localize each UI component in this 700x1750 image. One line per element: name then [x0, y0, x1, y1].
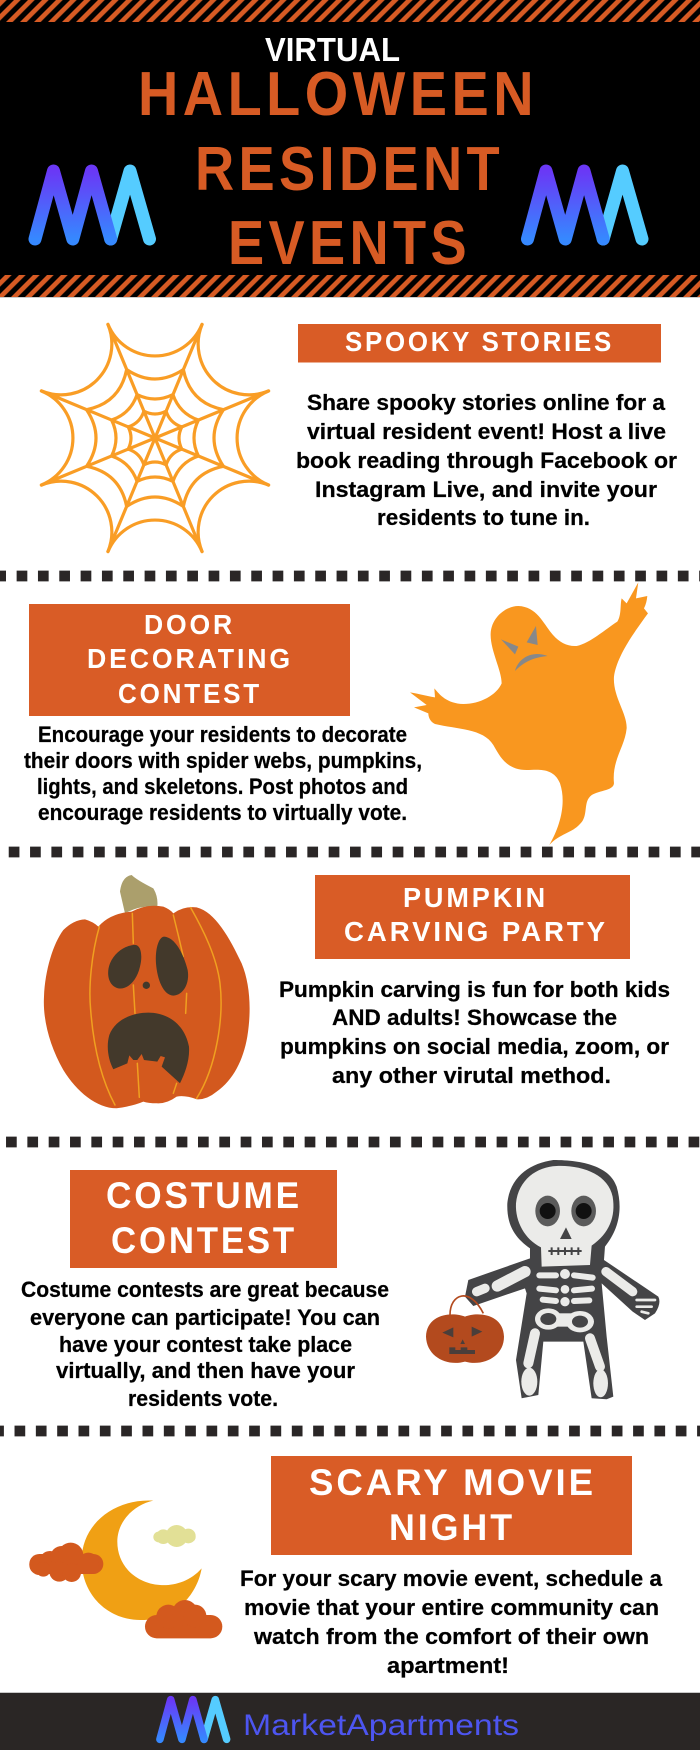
icon: left logo [35, 171, 150, 239]
icon: right logo [528, 171, 642, 239]
text: pumpkin carving description: Pumpkin carving is fun for both kids [279, 977, 670, 1002]
heading: door decorating contest: CONTEST [118, 678, 262, 709]
icon: moon and clouds [29, 1501, 222, 1638]
text: pumpkin carving description: AND adults! Showcase the [332, 1005, 617, 1030]
panel: costume contest [21, 1160, 659, 1411]
text: costume contest description [21, 1277, 389, 1411]
text: costume contest description: Costume contests are great because [21, 1277, 389, 1302]
heading: pumpkin carving party: CARVING PARTY [344, 916, 608, 947]
heading: door decorating contest: DOOR [144, 609, 235, 640]
panel: pumpkin carving party [44, 875, 670, 1108]
title: halloween resident events: EVENTS [228, 208, 471, 278]
text: pumpkin carving description [279, 977, 670, 1088]
text: spooky stories description: Share spooky stories online for a [307, 390, 666, 415]
heading: scary movie night: SCARY MOVIE [309, 1462, 596, 1503]
text: door decorating description: lights, and skeletons. Post photos and [37, 774, 408, 799]
text: pumpkin carving description: any other virutal method. [332, 1063, 611, 1088]
panel: door decorating contest [24, 582, 648, 845]
text: costume contest description: have your contest take place [59, 1332, 352, 1357]
heading: door decorating contest: DECORATING [87, 643, 293, 674]
text: scary movie description: apartment! [387, 1653, 509, 1678]
text: scary movie description [240, 1566, 663, 1678]
text: costume contest description: residents vote. [128, 1386, 278, 1411]
title: halloween resident events: RESIDENT [195, 134, 504, 204]
title: halloween resident events: HALLOWEEN [138, 59, 538, 129]
text: costume contest description: everyone can participate! You can [30, 1305, 380, 1330]
heading: costume contest [70, 1170, 337, 1268]
text: spooky stories description [296, 390, 677, 530]
text: scary movie description: movie that your entire community can [244, 1595, 659, 1620]
text: spooky stories description: virtual resident event! Host a live [307, 419, 666, 444]
text: spooky stories description: book reading through Facebook or [296, 448, 677, 473]
text: costume contest description: virtually, and then have your [56, 1358, 355, 1383]
text: door decorating description: their doors with spider webs, pumpkins, [24, 748, 422, 773]
text: pumpkin carving description: pumpkins on social media, zoom, or [280, 1034, 669, 1059]
icon: ghost [410, 582, 648, 845]
heading: pumpkin carving party [315, 875, 630, 959]
icon: pumpkin [44, 875, 250, 1108]
text: door decorating description [24, 722, 422, 825]
text: door decorating description: Encourage your residents to decorate [38, 722, 407, 747]
heading: spooky stories: SPOOKY STORIES [345, 326, 614, 357]
text: spooky stories description: residents to tune in. [377, 505, 590, 530]
heading: door decorating contest [29, 604, 350, 716]
text: scary movie description: For your scary movie event, schedule a [240, 1566, 663, 1591]
header banner [0, 0, 700, 298]
text: company name: MarketApartments [243, 1709, 519, 1742]
panel: spooky stories [41, 324, 677, 552]
text: scary movie description: watch from the comfort of their own [253, 1624, 649, 1649]
icon: skeleton with pumpkin bucket [426, 1160, 659, 1399]
heading: scary movie night [271, 1456, 632, 1555]
panel: scary movie night [29, 1456, 663, 1678]
icon: spider web [41, 324, 269, 552]
footer bar [0, 1692, 700, 1750]
icon: footer logo [160, 1700, 227, 1739]
heading: spooky stories [298, 324, 661, 362]
text: door decorating description: encourage residents to virtually vote. [38, 800, 407, 825]
heading: scary movie night: NIGHT [389, 1507, 515, 1548]
title: virtual: VIRTUAL [265, 31, 400, 68]
heading: costume contest: COSTUME [106, 1175, 302, 1216]
heading: costume contest: CONTEST [111, 1220, 297, 1261]
text: spooky stories description: Instagram Live, and invite your [315, 477, 657, 502]
heading: pumpkin carving party: PUMPKIN [403, 882, 548, 913]
title: halloween resident events [138, 59, 538, 278]
